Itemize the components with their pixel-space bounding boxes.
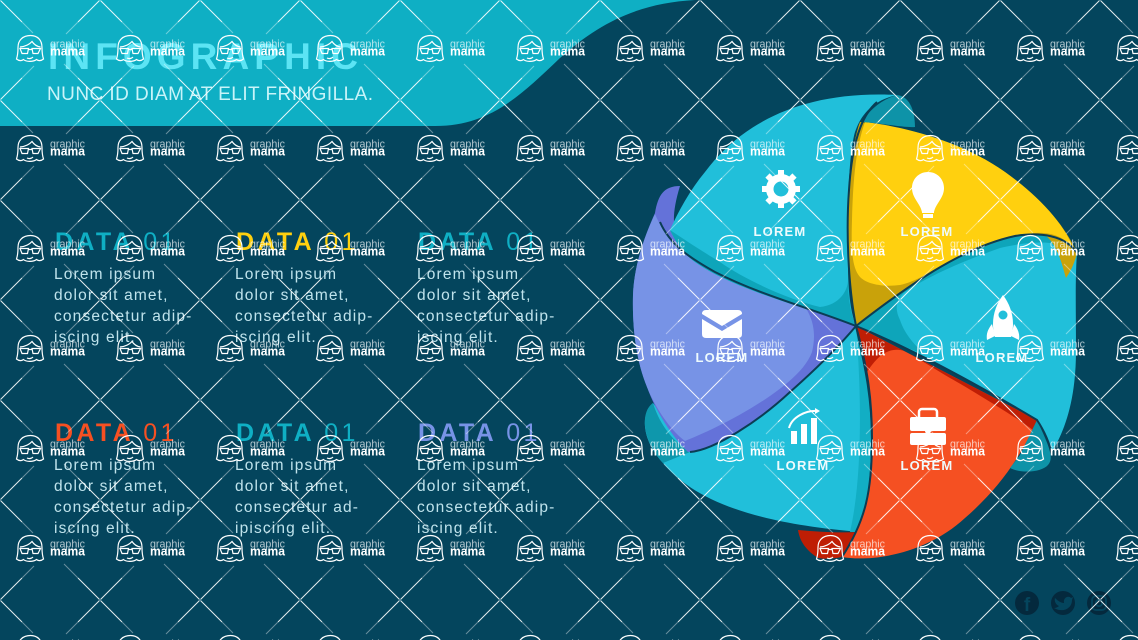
blade: rocket cyan — [856, 234, 1077, 472]
blade: gear cyan — [660, 95, 915, 326]
text block: data 6: iscing elit. — [417, 520, 499, 537]
blade: rocket cyan: LOREM — [976, 350, 1028, 365]
blade: briefcase orange: LOREM — [901, 458, 953, 473]
text block: data 3: dolor sit amet, — [417, 287, 532, 304]
text block: data 5: Lorem ipsum — [235, 457, 337, 474]
text block: data 1: DATA 01 — [55, 228, 178, 256]
text block: data 5: DATA 01 — [236, 419, 359, 447]
icon: briefcase — [910, 409, 946, 445]
icon: gear — [762, 170, 800, 208]
text block: data 1: Lorem ipsum — [54, 266, 156, 283]
text block: data 5 — [235, 419, 359, 537]
text block: data 2: Lorem ipsum — [235, 266, 337, 283]
subtitle: NUNC ID DIAM AT ELIT FRINGILLA. — [47, 84, 373, 105]
blade: gear cyan: LOREM — [754, 224, 806, 239]
text block: data 4: dolor sit amet, — [54, 478, 169, 495]
blade: bulb yellow: LOREM — [901, 224, 953, 239]
icon: instagram — [1087, 591, 1111, 615]
text block: data 2: dolor sit amet, — [235, 287, 350, 304]
text block: data 1: dolor sit amet, — [54, 287, 169, 304]
text block: data 5: consectetur ad- — [235, 499, 359, 516]
icon: rocket — [987, 295, 1019, 340]
text block: data 4: iscing elit. — [54, 520, 136, 537]
text block: data 4: DATA 01 — [55, 419, 178, 447]
text block: data 3: iscing elit. — [417, 329, 499, 346]
text block: data 3 — [417, 228, 555, 346]
icon: facebook: f — [1024, 595, 1031, 616]
text block: data 2: consectetur adip- — [235, 308, 373, 325]
text block: data 3: Lorem ipsum — [417, 266, 519, 283]
text block: data 6: consectetur adip- — [417, 499, 555, 516]
text block: data 2: DATA 01 — [236, 228, 359, 256]
text block: data 1: consectetur adip- — [54, 308, 192, 325]
text block: data 4 — [54, 419, 192, 537]
text block: data 5: ipiscing elit. — [235, 520, 331, 537]
pinwheel chart — [633, 95, 1077, 559]
title: INFOGRAPHIC — [48, 36, 363, 77]
text block: data 5: dolor sit amet, — [235, 478, 350, 495]
text block: data 6 — [417, 419, 555, 537]
icon: twitter — [1051, 591, 1075, 615]
text block: data 6: dolor sit amet, — [417, 478, 532, 495]
blade: chart cyan — [645, 326, 872, 559]
blade: envelope purple — [633, 186, 856, 452]
text block: data 3: DATA 01 — [418, 228, 541, 256]
text block: data 4: Lorem ipsum — [54, 457, 156, 474]
blade: chart cyan: LOREM — [777, 458, 829, 473]
blade: briefcase orange — [842, 326, 1037, 558]
text block: data 2 — [235, 228, 373, 346]
text block: data 3: consectetur adip- — [417, 308, 555, 325]
icon: bar chart — [789, 408, 820, 444]
text block: data 4: consectetur adip- — [54, 499, 192, 516]
text block: data 6: Lorem ipsum — [417, 457, 519, 474]
social icons — [1015, 591, 1111, 616]
text block: data 2: iscing elit. — [235, 329, 317, 346]
text block: data 1: iscing elit. — [54, 329, 136, 346]
text block: data 6: DATA 01 — [418, 419, 541, 447]
icon: envelope — [702, 310, 742, 338]
blade: bulb yellow — [848, 122, 1077, 326]
icon: light bulb — [912, 172, 944, 218]
header banner — [0, 0, 695, 126]
text block: data 1 — [54, 228, 192, 346]
blade: envelope purple: LOREM — [696, 350, 748, 365]
